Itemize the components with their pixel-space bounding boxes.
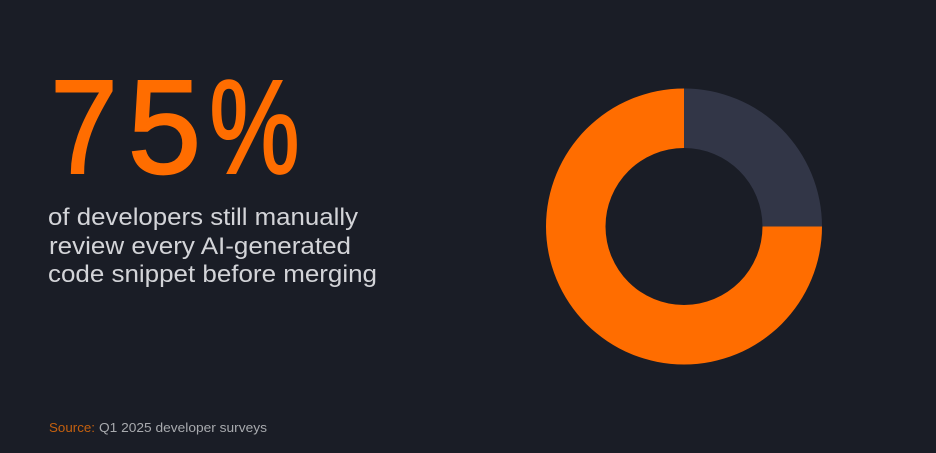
source note: Source: <box>49 420 95 435</box>
headline statistic: 75%: % <box>210 54 300 202</box>
donut chart: 75 / 25 <box>546 88 822 365</box>
donut segment: 75% <box>546 88 822 365</box>
headline statistic: 75%: 5 <box>128 54 201 202</box>
description text: code snippet before merging <box>48 261 377 288</box>
description text <box>48 204 377 288</box>
source note: Q1 2025 developer surveys <box>99 420 268 435</box>
description text: of developers still manually <box>48 204 358 231</box>
donut segment: remaining 25% <box>684 88 822 226</box>
headline statistic: 75%: 7 <box>50 54 118 202</box>
description text: review every AI-generated <box>49 233 351 260</box>
headline statistic: 75% <box>50 54 300 202</box>
